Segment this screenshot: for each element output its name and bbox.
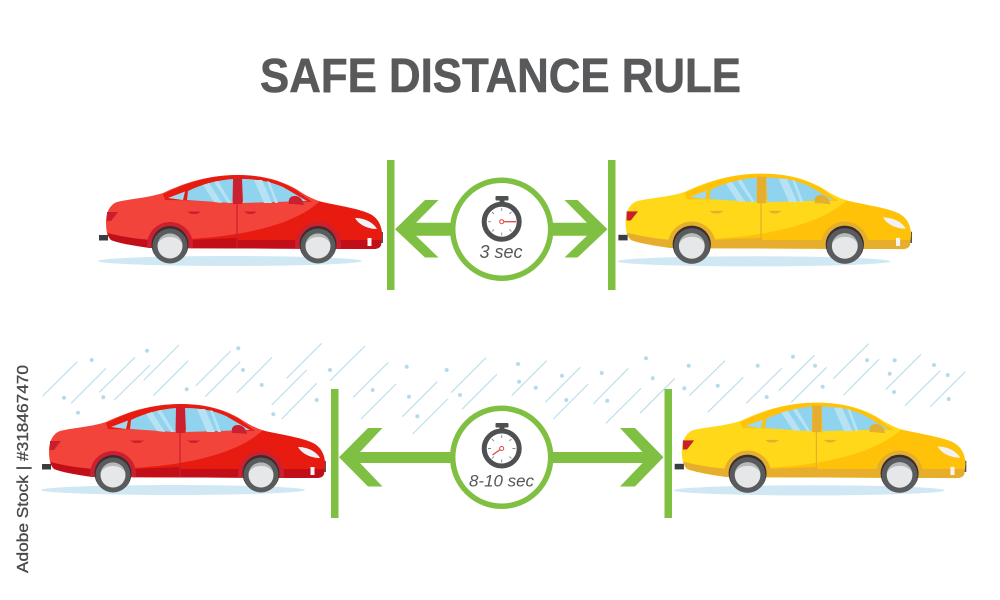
rain pattern: [43, 343, 965, 434]
label: 8-10 sec: 8-10 sec: [469, 472, 534, 490]
left arrow: [339, 428, 455, 486]
distance marker: 3 sec: [387, 160, 616, 290]
right limit bar: [608, 160, 616, 290]
left limit bar: [387, 160, 394, 290]
yellow car, normal conditions: [617, 174, 919, 268]
circle badge: [453, 408, 551, 506]
right arrow: [548, 428, 664, 486]
right arrow: [548, 200, 608, 258]
left limit bar: [331, 389, 338, 518]
icon: stopwatch: [484, 423, 519, 466]
distance marker: 8-10 sec: [331, 389, 672, 518]
left arrow: [395, 200, 455, 258]
red car, rain: [41, 404, 333, 497]
icon: stopwatch: [484, 196, 519, 239]
side stock credit: Adobe Stock | #318467470: [15, 365, 32, 573]
red car, normal conditions: [98, 175, 390, 268]
circle badge: [453, 180, 551, 278]
right limit bar: [664, 389, 672, 518]
title: SAFE DISTANCE RULE: [260, 50, 741, 103]
yellow car, rain: [674, 403, 974, 497]
label: 3 sec: 3 sec: [479, 242, 523, 262]
